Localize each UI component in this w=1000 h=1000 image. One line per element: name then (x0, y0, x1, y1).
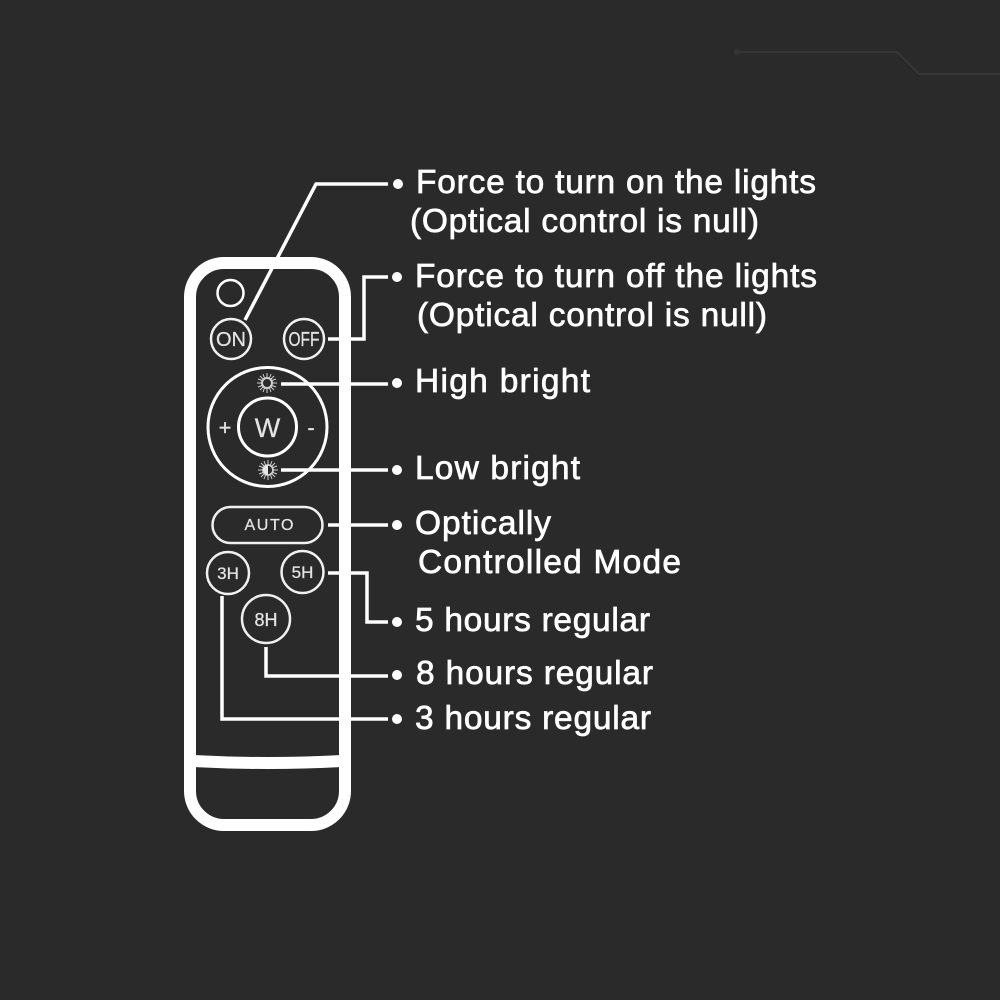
label: low bright: Low bright (415, 450, 581, 487)
button: OFF: OFF (288, 329, 320, 351)
connector: OFF (328, 277, 388, 339)
connector: AUTO (328, 523, 388, 527)
label: 3 hours: 3 hours regular (415, 700, 651, 737)
button: 5H: 5H (292, 563, 313, 582)
button: 3H (207, 552, 249, 594)
label: force off (415, 258, 817, 334)
connector: ON (245, 184, 388, 320)
label: high bright: High bright (415, 363, 591, 400)
label: force on: (Optical control is null) (410, 203, 759, 240)
label: 5 hours: 5 hours regular (415, 602, 650, 639)
label: force off: Force to turn off the lights (415, 258, 817, 295)
connector: high bright (281, 382, 388, 386)
icon: high brightness sun (257, 373, 277, 393)
button: ON (211, 319, 251, 359)
connector: 8H (266, 647, 388, 676)
brightness dial (208, 368, 327, 486)
button: 5H (282, 551, 324, 593)
connector: low bright (281, 468, 388, 472)
icon: low brightness sun (258, 460, 278, 480)
label: force on (410, 164, 816, 240)
button: AUTO: AUTO (244, 517, 294, 534)
connector: 5H (328, 573, 388, 622)
button: ON: ON (216, 329, 246, 351)
brightness dial: W (255, 413, 281, 443)
remote sensor circle (218, 280, 244, 306)
connector: 3H (222, 596, 388, 719)
brightness dial: + (219, 415, 231, 440)
button: 8H: 8H (254, 610, 278, 630)
label: force on: Force to turn on the lights (416, 164, 816, 201)
button: 8H (242, 595, 290, 643)
button: 3H: 3H (217, 564, 239, 583)
button: OFF (284, 319, 324, 359)
label: optically controlled mode: Controlled Mode (418, 544, 681, 581)
brightness dial: - (307, 415, 315, 440)
label: force off: (Optical control is null) (417, 297, 767, 334)
bullet dots (392, 179, 403, 724)
remote control body (190, 263, 345, 825)
label: optically controlled mode (415, 505, 681, 581)
label: 8 hours: 8 hours regular (416, 655, 653, 692)
label: optically controlled mode: Optically (415, 505, 551, 542)
button: AUTO (212, 507, 322, 543)
